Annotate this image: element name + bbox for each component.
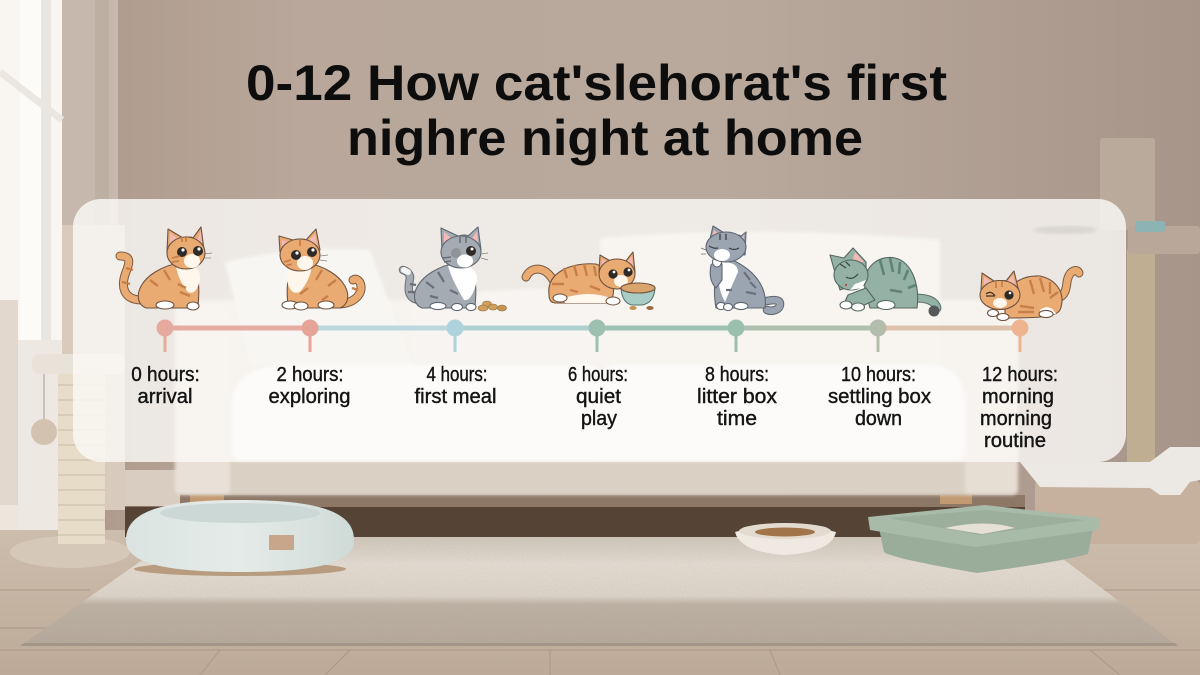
label: 6 hours bbox=[568, 364, 628, 430]
label: 12 hours: 12 hours: bbox=[982, 364, 1058, 386]
label: 10 hours: down bbox=[855, 408, 902, 430]
node: 0 hours bbox=[156, 320, 174, 352]
node: 4 hours bbox=[446, 320, 464, 352]
title bbox=[246, 55, 947, 166]
label: 6 hours: play bbox=[581, 408, 617, 430]
icon: grey cat with kibble, first meal bbox=[403, 227, 506, 311]
label: 6 hours: quiet bbox=[576, 386, 621, 408]
label: 2 hours bbox=[268, 364, 350, 408]
node: 8 hours bbox=[728, 320, 744, 352]
window and curtains bbox=[0, 0, 125, 535]
label: 0 hours bbox=[131, 364, 200, 408]
rug bbox=[20, 537, 1178, 646]
right litter box bbox=[1020, 447, 1200, 544]
node: 2 hours bbox=[302, 320, 318, 352]
panel: translucent timeline card bbox=[73, 199, 1126, 462]
label: 4 hours bbox=[414, 364, 496, 408]
right cat tree bbox=[1100, 138, 1200, 465]
label: 8 hours bbox=[697, 364, 777, 430]
label: 2 hours: exploring bbox=[268, 386, 350, 408]
label: 12 hours: routine bbox=[984, 430, 1046, 452]
node: 10 hours bbox=[870, 320, 886, 352]
food bowl bbox=[735, 523, 836, 555]
title: nighre night at home bbox=[347, 110, 863, 166]
sofa bbox=[175, 232, 1018, 504]
icon: orange cat sitting, arrival bbox=[120, 227, 212, 310]
icon: orange cat sitting, exploring bbox=[279, 229, 361, 310]
left cat tree with toy bbox=[10, 354, 130, 568]
node: 12 hours bbox=[1012, 320, 1028, 352]
icon: orange cat lying down, morning routine bbox=[980, 271, 1079, 320]
icon: grey cat grooming, litter box time bbox=[701, 226, 780, 311]
label: 12 hours: morning bbox=[982, 386, 1054, 408]
icon: orange cat eating from bowl, quiet play bbox=[526, 252, 655, 310]
background: living room wall bbox=[0, 0, 1200, 535]
label: 10 hours bbox=[828, 364, 931, 430]
sage litter tray bbox=[868, 505, 1100, 573]
label: 12 hours: morning bbox=[980, 408, 1052, 430]
label: 4 hours: first meal bbox=[414, 386, 496, 408]
label: 8 hours: time bbox=[717, 408, 757, 430]
label: 10 hours: 10 hours: bbox=[841, 364, 916, 386]
skirting board bbox=[125, 470, 180, 506]
label: 6 hours: 6 hours: bbox=[568, 364, 628, 386]
node: 6 hours bbox=[588, 320, 606, 352]
smudge on panel bbox=[1033, 226, 1097, 234]
label: 2 hours: 2 hours: bbox=[276, 364, 344, 386]
timeline bbox=[156, 320, 1028, 352]
floor bbox=[0, 530, 1200, 675]
title: 0-12 How cat'slehorat's first bbox=[246, 55, 947, 111]
label: 4 hours: 4 hours: bbox=[426, 364, 488, 386]
label: 10 hours: settling box bbox=[828, 386, 931, 408]
dark gap under sofa bbox=[125, 495, 1025, 537]
cat bed bbox=[126, 500, 354, 576]
icon: green cat crouching, settling down bbox=[830, 248, 940, 316]
label: 12 hours bbox=[980, 364, 1058, 452]
label: 0 hours: 0 hours: bbox=[131, 364, 200, 386]
label: 8 hours: litter box bbox=[697, 386, 777, 408]
label: 8 hours: 8 hours: bbox=[705, 364, 769, 386]
label: 0 hours: arrival bbox=[138, 386, 192, 408]
